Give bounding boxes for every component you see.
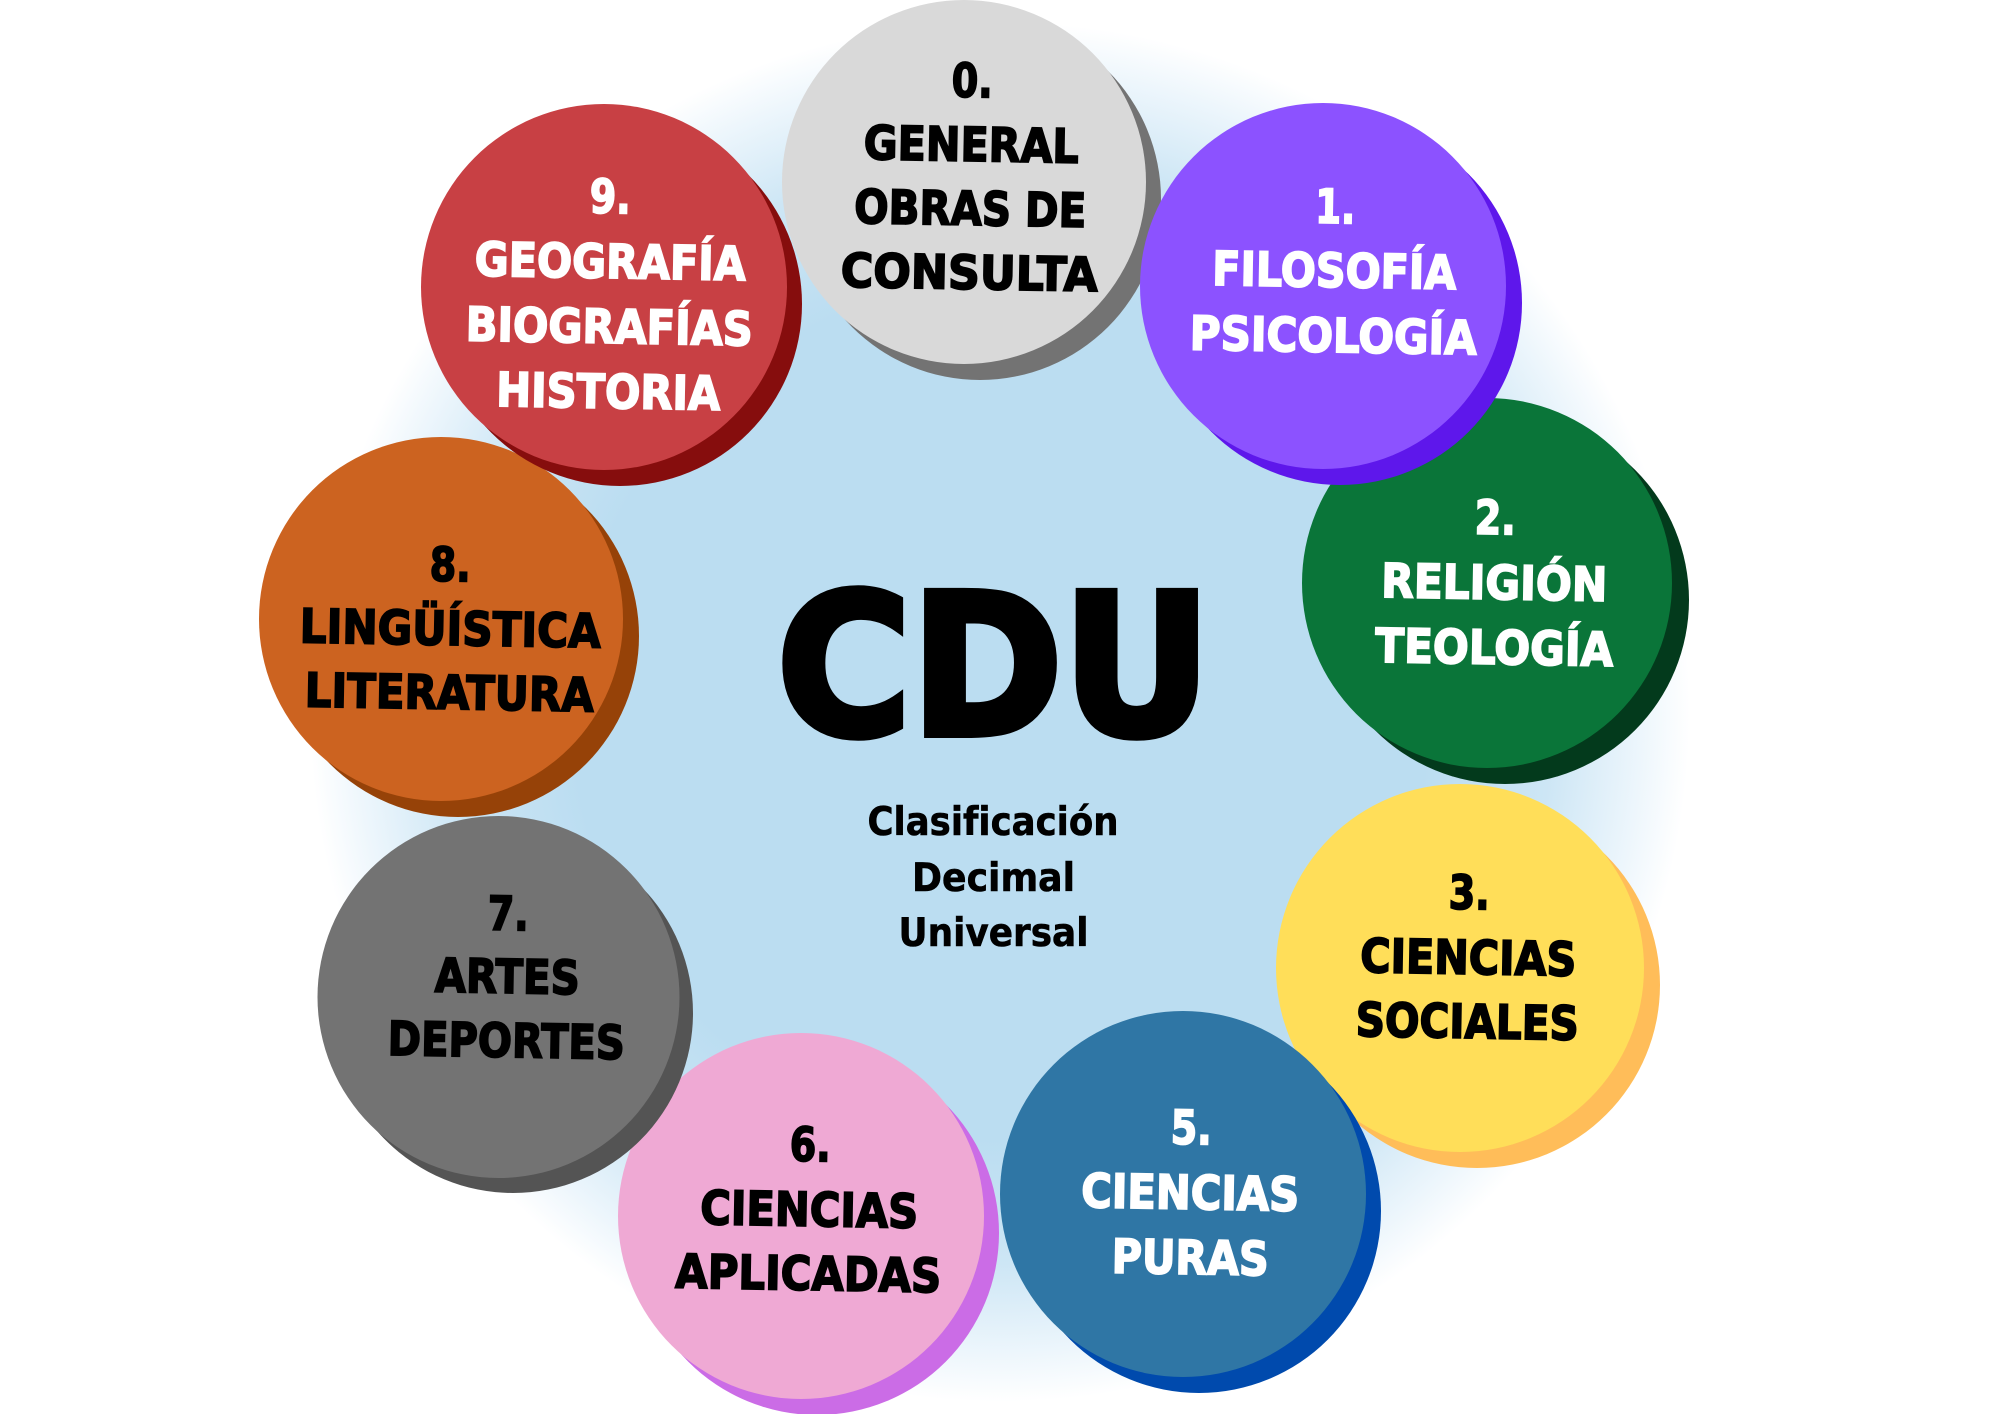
- circle 2: religión teología: [1302, 398, 1689, 784]
- circle 9: geografía biografías historia: 9.: [589, 170, 631, 225]
- circle 2: religión teología: TEOLOGÍA: [1375, 619, 1614, 678]
- circle 7: artes deportes: [318, 816, 693, 1193]
- circle 8: lingüística literatura: LINGÜÍSTICA: [299, 599, 602, 660]
- circle 1: filosofía psicología: PSICOLOGÍA: [1189, 307, 1478, 367]
- subtitle: clasificación decimal universal: Clasificación: [868, 800, 1118, 845]
- circle 5: ciencias puras: CIENCIAS: [1081, 1164, 1300, 1223]
- circle 3: ciencias sociales: [1276, 784, 1660, 1168]
- circle 9: geografía biografías historia: HISTORIA: [496, 363, 721, 422]
- circle 8: lingüística literatura: 8.: [429, 538, 471, 593]
- circle 0: general obras de consulta: [782, 0, 1161, 380]
- circle 3: ciencias sociales: 3.: [1448, 866, 1490, 921]
- circle 7: artes deportes: DEPORTES: [387, 1012, 625, 1071]
- circle 9: geografía biografías historia: BIOGRAFÍAS: [465, 298, 753, 358]
- circle 6: ciencias aplicadas: 6.: [789, 1118, 831, 1173]
- title: CDU: CDU: [777, 553, 1211, 780]
- circle 1: filosofía psicología: [1140, 103, 1522, 485]
- circle 3: ciencias sociales: SOCIALES: [1355, 993, 1579, 1052]
- circle 0: general obras de consulta: OBRAS DE: [854, 180, 1087, 239]
- subtitle: clasificación decimal universal: Decimal: [912, 856, 1075, 901]
- circle 5: ciencias puras: PURAS: [1111, 1230, 1269, 1287]
- circle 3: ciencias sociales: CIENCIAS: [1360, 929, 1577, 988]
- circle 6: ciencias aplicadas: [618, 1033, 999, 1414]
- circle 0: general obras de consulta: CONSULTA: [840, 244, 1099, 303]
- circle 6: ciencias aplicadas: CIENCIAS: [700, 1181, 919, 1240]
- circle 5: ciencias puras: 5.: [1170, 1101, 1212, 1156]
- circle 6: ciencias aplicadas: APLICADAS: [675, 1245, 942, 1304]
- circle 2: religión teología: 2.: [1474, 491, 1516, 546]
- circle 0: general obras de consulta: GENERAL: [863, 116, 1079, 175]
- circle 8: lingüística literatura: LITERATURA: [304, 663, 595, 724]
- circle 5: ciencias puras: [1000, 1011, 1381, 1393]
- circle 9: geografía biografías historia: [421, 104, 802, 486]
- circle 7: artes deportes: 7.: [487, 887, 529, 942]
- circle 2: religión teología: RELIGIÓN: [1381, 554, 1608, 613]
- subtitle: clasificación decimal universal: [868, 800, 1118, 956]
- circle 1: filosofía psicología: 1.: [1315, 180, 1356, 235]
- circle 7: artes deportes: ARTES: [434, 949, 580, 1006]
- circle 9: geografía biografías historia: GEOGRAFÍA: [474, 233, 747, 292]
- circle 8: lingüística literatura: [259, 437, 639, 817]
- subtitle: clasificación decimal universal: Universal: [898, 911, 1088, 956]
- circle 0: general obras de consulta: 0.: [951, 54, 993, 109]
- background glow: [310, 22, 1690, 1402]
- circle 1: filosofía psicología: FILOSOFÍA: [1212, 242, 1457, 301]
